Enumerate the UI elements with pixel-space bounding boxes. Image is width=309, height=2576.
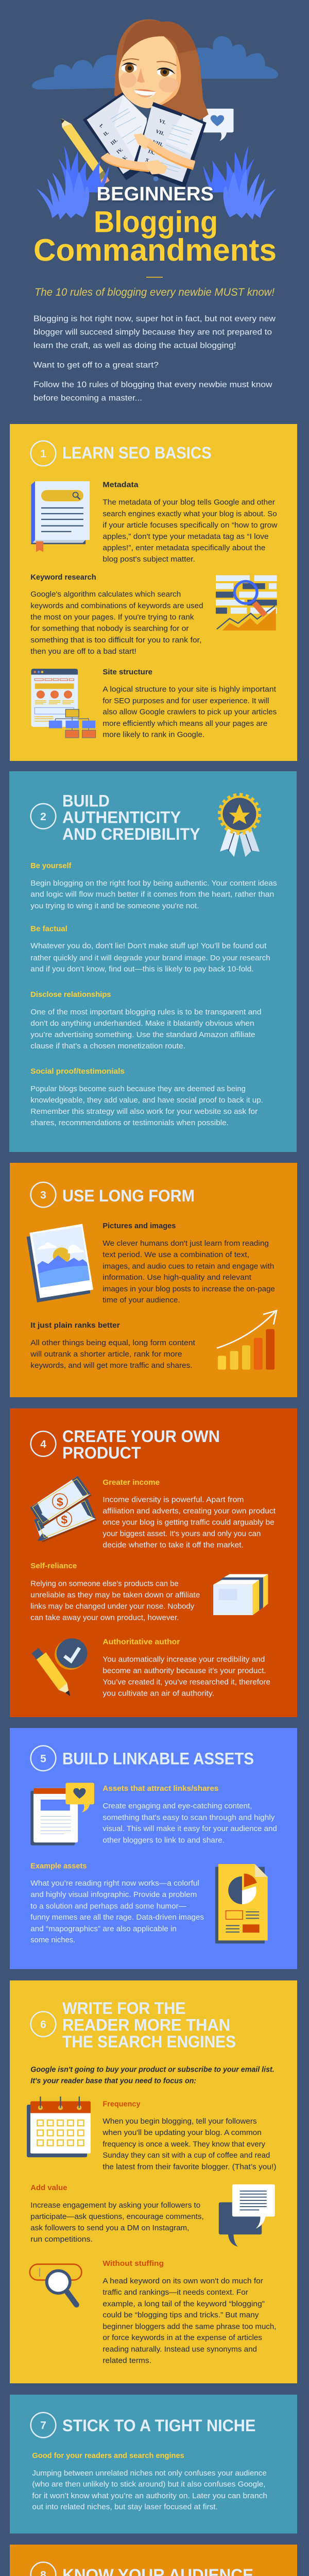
hero illustration: blogger hugging commandment tablets: III. [110,138,119,146]
intro text: Want to get off to a great start? [33,361,159,369]
text: without stuffing: A head keyword on its own won't do much for [102,2277,263,2285]
text: keyword research: keywords and combinations of keywords are used [30,602,203,610]
panel: 8 know your audience [10,2545,297,2576]
text: site structure: more likely to rank in Google. [102,731,204,739]
text: keyword research [30,573,203,656]
text: add value: participate—ask questions, encourage comments, [30,2213,204,2221]
heading 2: AND CREDIBILITY [62,825,200,843]
heading 7: 7 [40,2419,46,2432]
text: self-reliance: links may be changed under your nose. Nobody [30,1602,195,1611]
text: be yourself: Begin blogging on the right foot by being authentic. Your content ideas [30,879,277,888]
intro text [33,314,276,402]
text: without stuffing: reading naturally. Instead use synonyms and [102,2345,257,2353]
panel: 1 learn SEO basics [10,424,297,761]
icon: report with pie chart [215,1864,268,1943]
title: Blogging [94,206,218,239]
panel: 3 use long form [10,1163,297,1397]
text: authoritative author: Authoritative author [102,1638,180,1646]
text: authoritative author: become an authority because it’s your product. [102,1667,266,1675]
text: disclose relationships [30,991,262,1050]
heading 3 [31,1182,195,1207]
text: greater income: your biggest asset. It's yours and only you can [102,1530,261,1538]
text: authoritative author: you cultivate an air of authority. [102,1690,214,1698]
text: without stuffing: Without stuffing [102,2260,164,2268]
heading 5 [31,1745,254,1771]
text: intro statement: It's your reader base that you need to focus on: [30,2077,196,2085]
text: be yourself: and logic will flow much better if it comes from the heart, rather than [30,891,274,899]
heading 6: READER MORE THAN [62,2016,230,2035]
heading 2: BUILD [62,791,110,810]
text: metadata: if your article focuses specifically on “how to grow [102,521,278,530]
text: pictures and images: time of your audience. [102,1296,180,1304]
text: disclose relationships: Disclose relationships [30,991,111,999]
text: good for readers and search engines: (who are then unlikely to stick around) but it also confuses Google, [32,2481,266,2489]
text: keyword research: the most on your pages. If you're trying to rank [30,614,194,622]
text: intro statement [30,2065,274,2085]
text: intro statement: Google isn't going to buy your product or subscribe to your email list. [30,2065,274,2074]
hero illustration: blogger hugging commandment tablets: IX. [147,149,156,156]
heading 4 [31,1427,220,1462]
text: ranks better: All other things being equal, long form content [30,1339,195,1347]
text: authoritative author [102,1638,270,1698]
icon: dollar bills: $ [57,1496,63,1509]
text: example assets: and highly visual infographic. Provide a problem [30,1891,197,1899]
text: site structure: also allow Google crawlers to pick up your articles [102,708,277,717]
icon: product boxes [213,1574,268,1615]
text: without stuffing: related terms. [102,2357,151,2365]
heading 2: AUTHENTICITY [62,808,181,826]
intro text: learn the craft, as well as doing the actual blogging! [33,341,236,350]
intro text: blogger will succeed simply because they are not prepared to [33,328,272,336]
icon: award ribbon badge [219,794,260,857]
heading 1 [31,441,212,466]
heading 2 [31,791,200,843]
hero illustration: blogger hugging commandment tablets: V. [122,155,129,162]
text: good for readers and search engines: Jumping between unrelated niches not only confuses your audience [32,2469,267,2478]
text: social proof [30,1067,263,1127]
text: keyword research: Google's algorithm calculates which search [30,590,181,599]
text: without stuffing: traffic and rankings—it needs context. For [102,2289,248,2297]
text: metadata [102,481,278,564]
text: keyword research: Keyword research [30,573,96,582]
heading 7: STICK TO A TIGHT NICHE [62,2416,255,2435]
heading 3: 3 [40,1189,46,1201]
text: disclose relationships: you’re advertising something. Use the standard Amazon affiliate [30,1031,255,1039]
text: assets that attract links: Assets that attract links/shares [102,1785,218,1793]
heading 4: 4 [40,1438,46,1450]
text: keyword research: something that is too difficult for you to rank for, [30,636,201,645]
icon: speech bubbles [219,2184,275,2247]
text: pictures and images: images in your blog posts to increase the on-page [102,1285,275,1293]
heading 2: 2 [40,811,46,823]
text: example assets [30,1862,204,1944]
text: frequency: the latest from their favorite blogger. (That’s you!) [102,2163,276,2171]
hero illustration: blogger hugging commandment tablets [32,19,278,219]
heading 4: PRODUCT [62,1444,141,1462]
text: assets that attract links [102,1785,277,1844]
text: assets that attract links: visual. This will make it easy for your audience and [102,1825,277,1833]
heading 6 [31,1999,236,2051]
panel: 7 stick to a tight niche [10,2395,297,2534]
text: social proof: shares, recommendations or testimonials when possible. [30,1119,229,1127]
text: ranks better [30,1321,195,1370]
panel: 4 create your own product [10,1409,297,1717]
icon: article page with heart bubble [30,1783,94,1845]
text: add value [30,2184,204,2244]
heading 4: CREATE YOUR OWN [62,1427,220,1446]
hero illustration: blogger hugging commandment tablets: VIII. [151,139,164,148]
hero illustration: blogger hugging commandment tablets: IV. [115,147,124,155]
text: site structure: Site structure [102,668,152,676]
icon: keyword magnifier and rank chart [216,575,277,631]
text: example assets: Example assets [30,1862,87,1870]
text: authoritative author: You’ve created it, you’ve researched it, therefore [102,1678,270,1686]
text: be yourself [30,862,277,910]
heading 5: 5 [40,1753,46,1765]
panel: 2 build authenticity and credibility [9,771,297,1152]
heading 6: THE SEARCH ENGINES [62,2032,236,2051]
text: without stuffing [102,2260,276,2365]
text: add value: Add value [30,2184,67,2192]
text: example assets: What you’re reading right now works—a colorful [30,1879,199,1888]
heading 1: 1 [40,448,46,460]
text: metadata: search engines exactly what your blog is about. So [102,510,277,518]
text: frequency: Sunday they can sit with a cup of coffee and read [102,2151,270,2160]
text: metadata: blog post's subject matter. [102,555,195,564]
icon: site structure browser [31,669,96,738]
text: good for readers and search engines [32,2452,267,2512]
text: site structure: A logical structure to your site is highly important [102,686,276,694]
text: ranks better: keywords, and will get more traffic and shares. [30,1362,193,1370]
text: social proof: Social proof/testimonials [30,1067,125,1076]
text: self-reliance: Self-reliance [30,1562,77,1570]
text: social proof: knowledgeable, they add value, and have social proof to back it up. [30,1096,263,1105]
hero illustration: blogger hugging commandment tablets: II. [102,130,110,138]
text: be factual: and if you don’t know, find out—this is likely to pay back 10-fold. [30,965,254,974]
text: social proof: Popular blogs become such because they are deemed as being [30,1085,246,1093]
heading 7 [31,2413,255,2437]
text: greater income: Income diversity is powerful. Apart from [102,1496,244,1504]
text: add value: run competitions. [30,2235,93,2244]
text: keyword research: then you are off to a bad start! [30,648,136,656]
text: self-reliance: can take away your own product, however. [30,1614,179,1622]
text: without stuffing: or force keywords in at the expense of articles [102,2334,262,2342]
text: example assets: to a solution and perhaps add some humor— [30,1902,186,1910]
text: good for readers and search engines: Good for your readers and search engines [32,2452,184,2460]
text: authoritative author: You automatically increase your credibility and [102,1655,265,1664]
text: good for readers and search engines: out into related niches, but stay laser focused at first. [32,2503,218,2512]
text: greater income: once your blog is getting traffic could arguably be [102,1518,274,1527]
icon: calendar [27,2096,91,2157]
text: pictures and images: information. Use high-quality and relevant [102,1274,251,1282]
heading 8 [31,2562,253,2576]
icon: dollar bills: $ [61,1514,68,1526]
title: Commandments [33,233,277,267]
text: ranks better: It just plain ranks better [30,1321,120,1330]
text: pictures and images [102,1222,275,1304]
text: metadata: Metadata [102,481,139,489]
subtitle: The 10 rules of blogging every newbie MUST know! [35,286,274,298]
text: without stuffing: could be “blogging tips and tricks.” But many [102,2311,259,2319]
text: site structure: for SEO purposes and for user experience. It will [102,697,269,705]
icon: rising bar chart with arrow [217,1311,277,1370]
text: site structure [102,668,277,739]
text: example assets: and “mapographics” are also applicable in [30,1925,177,1933]
text: disclose relationships: One of the most important blogging rules is to be transparent and [30,1008,262,1016]
text: keyword research: for something that nobody is searching for or [30,625,189,633]
text: metadata: apples,” don't type your metadata tag as “I love [102,533,269,541]
text: pictures and images: text period. We use a combination of text, [102,1251,249,1259]
heading 6: WRITE FOR THE [62,1999,185,2018]
icon: pencil and check mark [31,1638,88,1696]
text: pictures and images: Pictures and images [102,1222,176,1230]
text: ranks better: will outrank a shorter article, rank for more [30,1350,182,1359]
text: add value: Increase engagement by asking your followers to [30,2201,200,2210]
panel: 6 write for the reader [10,1980,297,2383]
text: be yourself: Be yourself [30,862,72,870]
text: without stuffing: example, a long tail of the keyword “blogging” [102,2300,265,2308]
text: pictures and images: images, and audio cues to retain and engage with [102,1262,274,1270]
text: greater income: decide whether to take it off the market. [102,1541,244,1549]
title [33,183,277,267]
hero illustration: blogger hugging commandment tablets: VI. [158,118,167,126]
text: be factual: Be factual [30,925,67,934]
hero illustration: blogger hugging commandment tablets: X. [144,157,151,164]
text: be factual: Whatever you do, don't lie! Don’t make stuff up! You’ll be found out [30,942,266,951]
text: disclose relationships: clause if that’s a chosen monetization route. [30,1042,185,1050]
text: frequency: When you begin blogging, tell your followers [102,2117,257,2126]
text: metadata: The metadata of your blog tells Google and other [102,499,275,507]
text: be yourself: you trying to wing it and be someone you're not. [30,902,199,910]
intro text: Follow the 10 rules of blogging that every newbie must know [33,380,272,389]
intro text: before becoming a master... [33,394,142,402]
heading 1: LEARN SEO BASICS [62,444,212,462]
panel: 5 build linkable assets [10,1728,297,1969]
text: without stuffing: beginner bloggers add the same phrase too much, [102,2323,276,2331]
text: good for readers and search engines: for it won’t know what you’re an authority on. Later you can branch [32,2492,267,2500]
intro text: Blogging is hot right now, super hot in fact, but not every new [33,314,276,324]
text: frequency: frequency is once a week. They know that every [102,2140,266,2148]
text: self-reliance [30,1562,200,1622]
text: site structure: more efficiently which means all your pages are [102,720,267,728]
text: frequency: when you'll be updating your blog. A common [102,2129,262,2137]
text: disclose relationships: don't do anything underhanded. Make it blatantly obvious when [30,1020,254,1028]
text: be factual [30,925,270,974]
text: add value: ask followers to send you a DM on Instagram, [30,2224,189,2232]
text: frequency: Frequency [102,2100,140,2108]
text: example assets: some niches. [30,1936,75,1944]
hero illustration: blogger hugging commandment tablets: VII. [155,129,165,137]
text: greater income: affiliation and adverts, creating your own product [102,1507,276,1516]
hero illustration: blogger hugging commandment tablets: I. [98,123,105,129]
icon: search bar and magnifier [30,2264,81,2305]
text: greater income [102,1479,276,1549]
text: pictures and images: We clever humans don't just learn from reading [102,1240,269,1248]
title: BEGINNERS [97,183,214,205]
text: assets that attract links: something that's easy to scan through and highly [102,1814,275,1822]
text: metadata: apples!”, enter metadata specifically about the [102,544,266,552]
text: greater income: Greater income [102,1479,160,1487]
heading 5: BUILD LINKABLE ASSETS [62,1750,254,1768]
text: be factual: rather quickly and it will degrade your brand image. Do your research [30,954,270,962]
text: social proof: Remember this strategy will also work for your website so ask for [30,1108,258,1116]
heading 3: USE LONG FORM [62,1187,195,1205]
text: frequency [102,2100,276,2171]
text: example assets: funny memes are all the rage. Data-driven images [30,1913,204,1922]
text: assets that attract links: Create engaging and eye-catching content, [102,1802,252,1810]
icon: book with search bar [31,481,90,552]
text: self-reliance: Relying on someone else’s products can be [30,1580,179,1588]
icon: dollar bills [30,1476,97,1543]
icon: tilted photo [27,1224,93,1302]
text: assets that attract links: other bloggers to link to and share. [102,1836,225,1844]
heading 6: 6 [40,2019,46,2030]
text: self-reliance: unreliable as they may be taken down or affiliate [30,1591,200,1599]
